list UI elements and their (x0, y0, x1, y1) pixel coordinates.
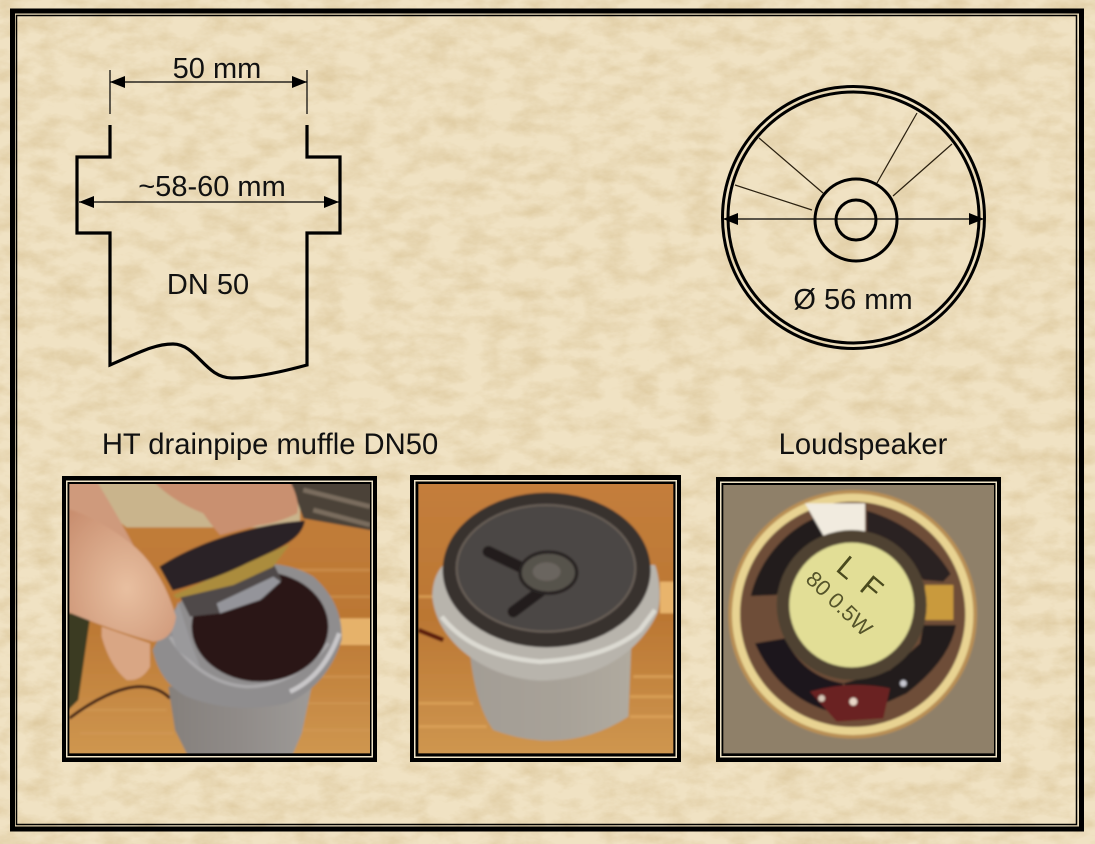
flange (432, 565, 660, 681)
label: diameter: Ø 56 mm (793, 284, 913, 316)
center cap (520, 552, 577, 593)
dimension arrow (723, 218, 984, 220)
printed marking: L F (830, 550, 891, 609)
diagram: pipe cross-section DN 50 (77, 53, 340, 378)
heading: loudspeaker: Loudspeaker (779, 429, 948, 461)
label: DN 50: DN 50 (167, 269, 249, 301)
spokes (735, 113, 952, 210)
fingers (153, 481, 298, 535)
magnet (777, 530, 927, 680)
printed marking: 80 0.5W (801, 566, 878, 641)
diagram: loudspeaker front view (722, 86, 984, 348)
pipe body (168, 687, 312, 757)
wire (69, 687, 170, 718)
speaker rim (173, 544, 290, 598)
speaker disc (159, 521, 305, 591)
dimension: 50 mm: 50 mm (173, 53, 261, 85)
heading: drainpipe muffle: HT drainpipe muffle DN50 (102, 429, 438, 461)
photo: speaker seated on pipe muffle (410, 475, 681, 762)
speaker cone (180, 563, 282, 617)
pipe interior (192, 572, 328, 682)
white strut (805, 503, 865, 538)
photo: hand placing speaker on pipe muffle (62, 476, 377, 762)
gold strut (925, 585, 953, 620)
speaker disc (443, 493, 651, 647)
dimension: 50 mm (110, 53, 307, 114)
dark openings (751, 516, 823, 596)
pipe outline (77, 125, 340, 378)
rim circles (722, 86, 984, 348)
spider arms (488, 552, 540, 612)
hub circles (815, 179, 897, 261)
photo: loudspeaker rear view (716, 477, 1001, 762)
pipe flange (153, 564, 342, 708)
printed marking (806, 556, 884, 634)
dimension: ~58-60 mm: ~58-60 mm (138, 171, 286, 203)
pipe body (468, 637, 632, 741)
metal ring (728, 490, 977, 739)
